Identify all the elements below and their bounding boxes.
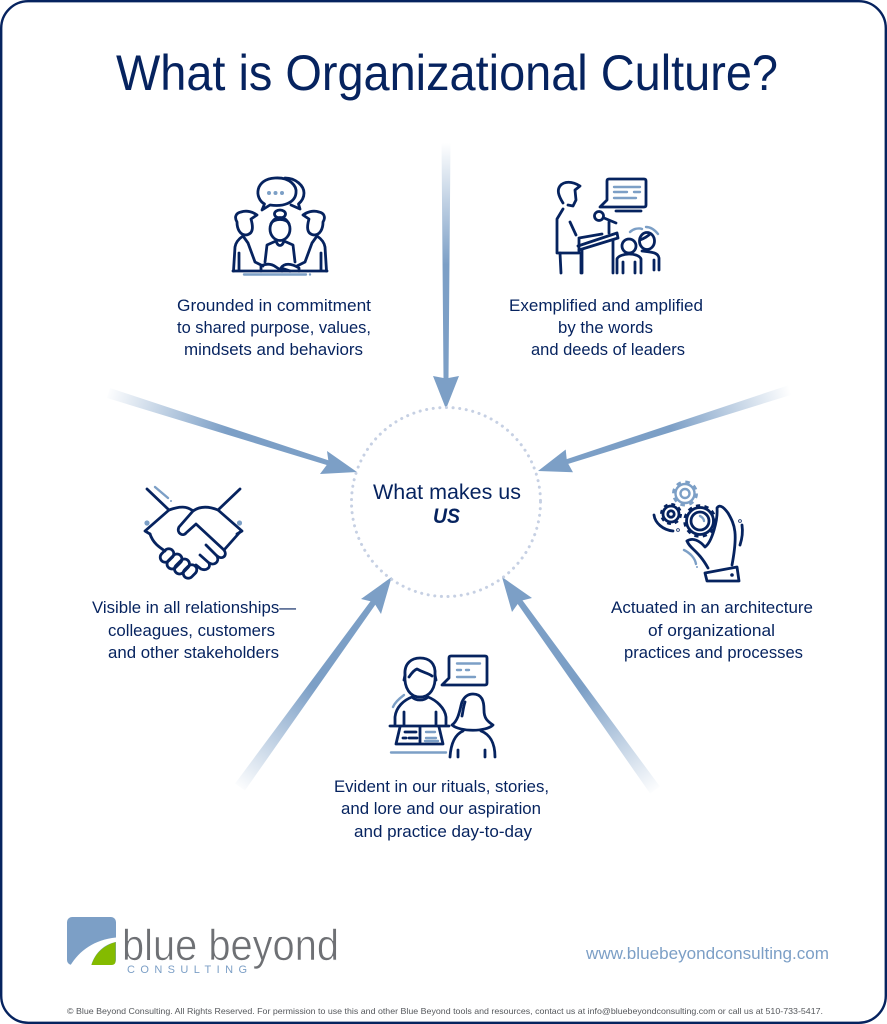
icon: speaker at podium <box>557 179 659 273</box>
panel: architecture <box>611 482 813 662</box>
icon: gears and hand <box>654 482 742 581</box>
text: leaders: Exemplified and amplified <box>509 296 703 315</box>
logo <box>67 917 339 976</box>
text: architecture <box>611 598 813 662</box>
panel: leaders <box>509 179 703 359</box>
center circle <box>352 408 540 596</box>
panel: rituals <box>334 656 549 841</box>
icon: handshake <box>144 487 242 580</box>
text: architecture: of organizational <box>648 621 775 640</box>
logo wordmark: blue beyond <box>122 921 339 970</box>
text: relationships: Visible in all relationships— <box>92 598 296 617</box>
text: rituals: and practice day-to-day <box>354 822 532 841</box>
text: relationships: and other stakeholders <box>108 643 279 662</box>
text: rituals <box>334 777 549 841</box>
text: shared purpose: Grounded in commitment <box>177 296 371 315</box>
text: leaders: and deeds of leaders <box>531 340 685 359</box>
text: shared purpose <box>177 296 371 359</box>
icon: team meeting <box>233 178 327 276</box>
title: What is Organizational Culture? <box>116 45 778 101</box>
text: rituals: Evident in our rituals, stories, <box>334 777 549 796</box>
text: leaders: by the words <box>558 318 653 337</box>
arrow: upper right <box>538 385 792 472</box>
copyright footer: © Blue Beyond Consulting. All Rights Reserved. For permission to use this and other Blue Beyond tools and resources, contact us at info@bluebeyondconsulting.com or call us at 510-733-5417. <box>67 1006 823 1016</box>
arrow: top <box>433 143 459 409</box>
text: rituals: and lore and our aspiration <box>341 799 541 818</box>
text: architecture: Actuated in an architecture <box>611 598 813 617</box>
website url: www.bluebeyondconsulting.com <box>585 944 829 963</box>
panel: shared purpose <box>177 178 371 359</box>
text: leaders <box>509 296 703 359</box>
arrow: upper left <box>107 388 357 474</box>
text: shared purpose: mindsets and behaviors <box>184 340 363 359</box>
text: relationships: colleagues, customers <box>108 621 275 640</box>
logo tagline: CONSULTING <box>127 964 247 976</box>
text: architecture: practices and processes <box>624 643 803 662</box>
arrow: lower left <box>235 577 392 790</box>
icon: two people with book <box>390 656 495 757</box>
logo mark <box>67 917 116 966</box>
text: shared purpose: to shared purpose, values, <box>177 318 371 337</box>
center text <box>373 481 521 528</box>
text: relationships <box>92 598 296 662</box>
center text: US <box>433 505 460 528</box>
panel: relationships <box>92 487 296 662</box>
arrow: lower right <box>502 577 660 794</box>
center text: What makes us <box>373 481 521 504</box>
